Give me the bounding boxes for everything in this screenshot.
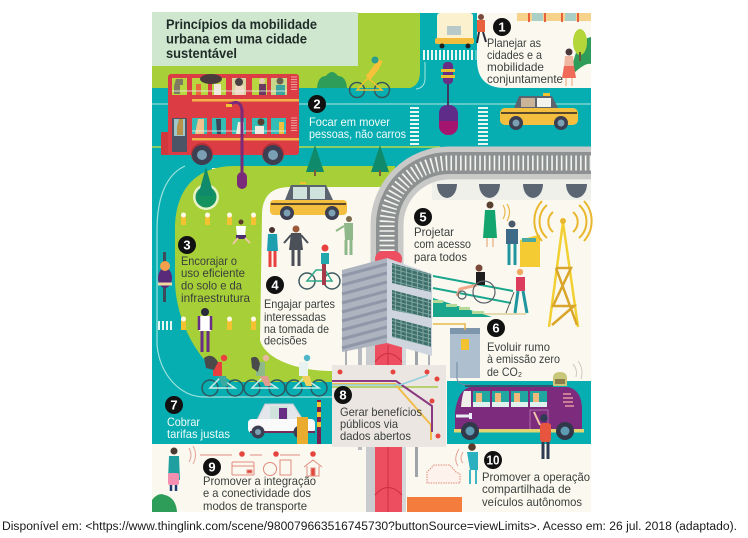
label 9: 9 [208, 460, 216, 474]
bus windows [473, 391, 547, 407]
electric bus [454, 386, 584, 440]
person boarding bus [534, 412, 551, 459]
label 4: Engajar partes [264, 297, 335, 311]
car at toll [248, 404, 315, 438]
cyclist with helmet [299, 244, 340, 289]
label 1: Planejar as [487, 36, 541, 50]
label 7: Cobrar [167, 415, 200, 429]
icon: bush bottom left [152, 494, 177, 512]
label 4 [264, 276, 335, 348]
street lamp [226, 102, 247, 189]
orange rectangle [407, 497, 462, 512]
title panel: sustentável [166, 46, 237, 61]
label 7 [165, 396, 230, 441]
label 4: decisões [264, 334, 307, 348]
tree and bush right [571, 29, 591, 76]
integration icons [200, 451, 322, 476]
wheelchair ramp [433, 276, 526, 317]
double-decker bus [161, 74, 299, 165]
label 3: Encorajar o [181, 254, 237, 268]
icon: green bush [317, 72, 347, 88]
label 6: de CO₂ [487, 365, 522, 379]
label 1: conjuntamente [487, 72, 563, 86]
label 5: com acesso [414, 237, 471, 251]
building [342, 251, 432, 366]
man with cane [506, 269, 527, 313]
label 5 [414, 208, 471, 264]
road curve [387, 163, 591, 275]
taxi middle [270, 182, 347, 220]
label 8: 8 [339, 388, 347, 402]
kiosk [520, 235, 540, 267]
woman with phone and bag [168, 446, 196, 491]
traffic light [439, 62, 458, 135]
label 4: interessadas [264, 310, 326, 324]
label 4: na tomada de [264, 322, 329, 336]
pedestrian woman [562, 48, 576, 86]
source caption: Disponível em: <https://www.thinglink.com/scene/980079663516745730?buttonSource=viewLimits>. Acesso em: 26 jul. 2018 (adaptado). [2, 521, 737, 533]
label 10: veículos autônomos [482, 495, 582, 509]
label 10 [482, 451, 590, 509]
label 7: 7 [170, 398, 178, 412]
walking person [199, 308, 211, 352]
red pillar under building [358, 340, 418, 512]
label 9: modos de transporte [203, 499, 307, 513]
label 8: dados abertos [340, 429, 411, 443]
label 3: 3 [183, 238, 191, 252]
label 10: compartilhada de [482, 482, 571, 496]
label 10: Promover a operação [482, 470, 590, 484]
lower windows [172, 118, 297, 152]
label 8: públicos via [340, 417, 398, 431]
teal panel for bus [447, 381, 591, 444]
label 10: 10 [486, 452, 500, 468]
robot driver [553, 361, 582, 386]
wheelchair user [457, 264, 495, 303]
bollards [181, 212, 256, 330]
label 6: 6 [492, 320, 500, 336]
label 1: 1 [498, 20, 506, 34]
label 1: mobilidade [487, 60, 544, 74]
label 2: pessoas, não carros [309, 127, 406, 141]
label 8: Gerar benefícios [340, 405, 422, 419]
buildings strip top right [517, 13, 591, 22]
label 6: à emissão zero [487, 352, 560, 366]
three cyclists [202, 355, 327, 396]
label 7: tarifas justas [167, 427, 230, 441]
charger box [433, 324, 480, 385]
front of school bus [435, 13, 474, 48]
person at kiosk [506, 220, 518, 265]
label 2: Focar em mover [309, 115, 390, 129]
communication tower [534, 201, 592, 327]
title panel: urbana em uma cidade [166, 32, 307, 46]
woman with phone [483, 202, 510, 247]
label 5: Projetar [414, 225, 454, 239]
toll booth [297, 400, 321, 444]
cyclist top [350, 56, 390, 98]
taxi top [500, 93, 578, 130]
label 6: Evoluir rumo [487, 340, 550, 354]
person with phone [456, 443, 478, 484]
label 6 [487, 319, 560, 379]
label 3: uso eficiente [181, 266, 245, 280]
label 4: 4 [271, 278, 279, 292]
label 9 [203, 458, 316, 513]
label 5: 5 [419, 210, 427, 224]
panel 8 open data [332, 365, 446, 447]
upper windows [172, 74, 297, 95]
label 9: Promover a integração [203, 474, 316, 488]
map pins [338, 370, 440, 438]
label 3: do solo e da [181, 278, 242, 292]
child playing [233, 220, 250, 244]
label 5: para todos [414, 250, 467, 264]
title panel [152, 12, 358, 66]
background map [152, 13, 591, 512]
label 9: e a conectividade dos [203, 486, 311, 500]
stakeholders group [267, 216, 353, 267]
label 1: cidades e a [487, 48, 542, 62]
label 3 [178, 236, 250, 305]
pedestrian near bus [477, 14, 486, 43]
trees [193, 145, 389, 210]
label 8 [334, 386, 422, 443]
label 2: 2 [313, 96, 321, 112]
shared autonomous car outline [427, 465, 460, 483]
label 2 [308, 95, 406, 141]
label 1 [487, 18, 563, 86]
cyclist seen from above [158, 252, 172, 302]
crosswalks [158, 50, 488, 330]
road lamps [437, 184, 587, 198]
title panel: Princípios da mobilidade [166, 17, 317, 32]
label 3: infraestrutura [181, 291, 250, 305]
